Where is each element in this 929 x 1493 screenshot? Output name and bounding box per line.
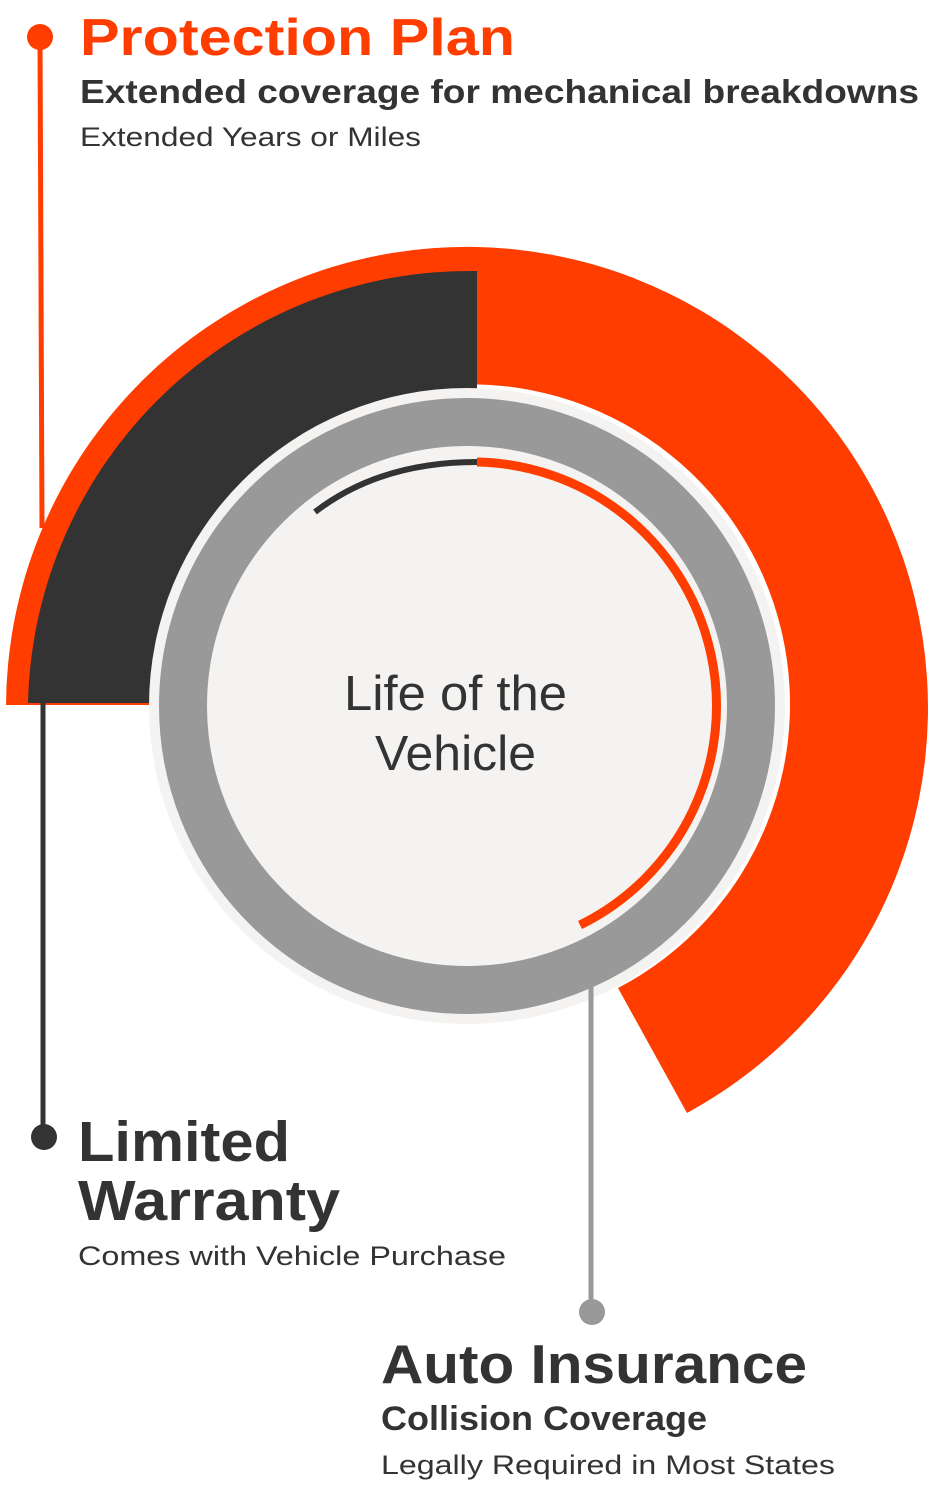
chart: concentric coverage rings xyxy=(6,247,928,1113)
text block: limited warranty: Warranty xyxy=(78,1169,340,1233)
dark limited warranty ring xyxy=(28,271,477,703)
text block: auto insurance xyxy=(381,1333,835,1480)
center label: Vehicle xyxy=(375,727,536,781)
text block: limited warranty: Comes with Vehicle Purchase xyxy=(78,1241,506,1271)
connector: protection plan xyxy=(27,24,53,528)
inner center circle xyxy=(209,448,725,964)
center label xyxy=(344,667,567,781)
thin dark inner arc xyxy=(315,462,477,512)
orange protection plan ring xyxy=(6,247,928,1113)
text block: auto insurance: Auto Insurance xyxy=(381,1333,807,1395)
text block: protection plan: Protection Plan xyxy=(80,9,515,67)
light border ring xyxy=(149,388,785,1024)
text block: auto insurance: Collision Coverage xyxy=(381,1400,707,1438)
text block: protection plan: Extended coverage for mechanical breakdowns xyxy=(80,73,919,110)
gray auto insurance ring xyxy=(183,422,751,990)
connector: limited warranty xyxy=(31,700,57,1150)
thin orange inner arc xyxy=(477,462,716,925)
connector: auto insurance xyxy=(579,985,605,1325)
text block: auto insurance: Legally Required in Most States xyxy=(381,1450,835,1480)
text block: protection plan xyxy=(80,9,919,152)
text block: limited warranty: Limited xyxy=(78,1110,290,1174)
text block: protection plan: Extended Years or Miles xyxy=(80,122,421,152)
text block: limited warranty xyxy=(78,1110,506,1271)
center label: Life of the xyxy=(344,667,567,721)
